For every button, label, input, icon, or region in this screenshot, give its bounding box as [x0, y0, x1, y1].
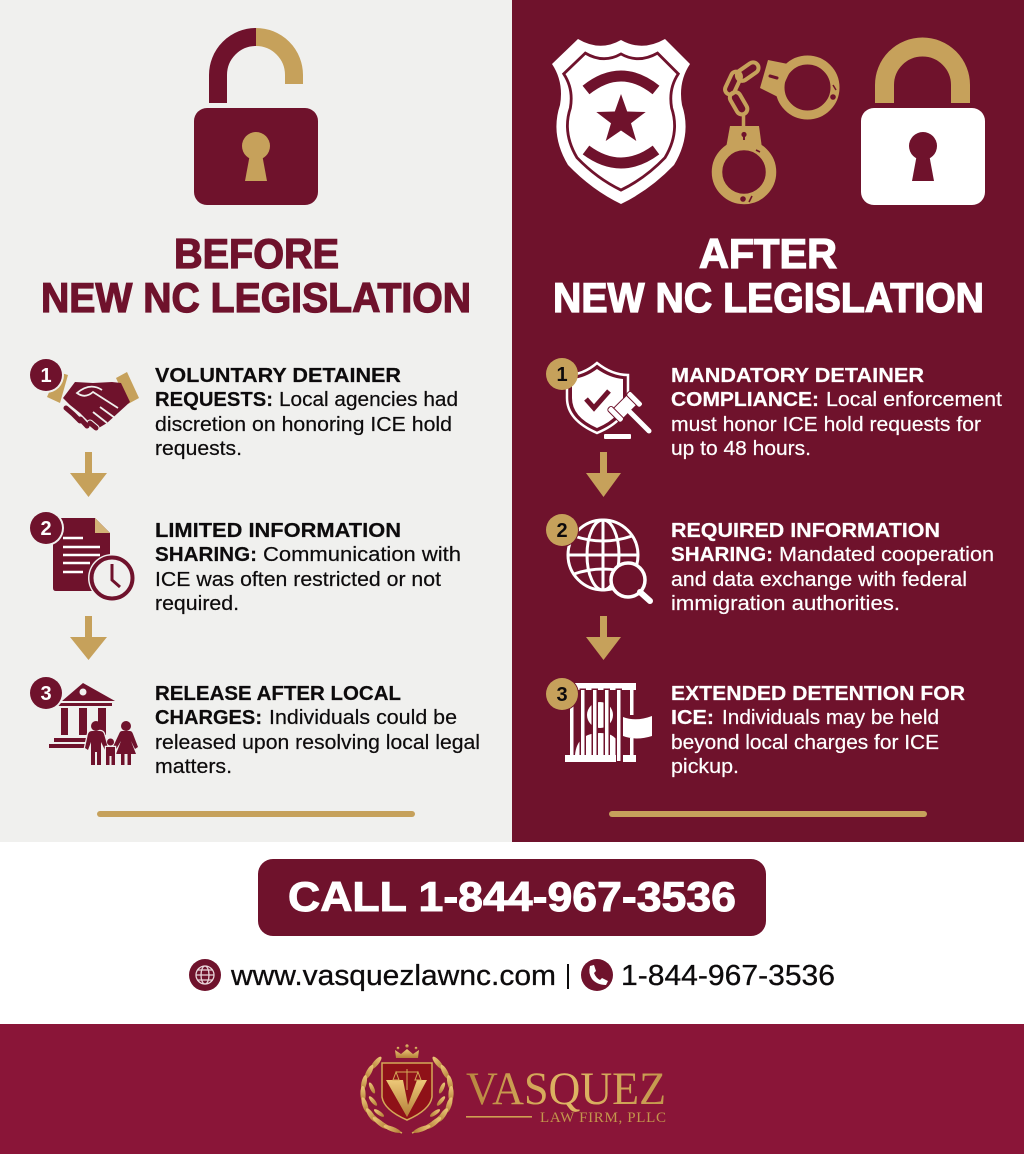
step 2 after: text: SHARING: [671, 543, 773, 566]
icon: phone [581, 959, 613, 991]
step 3 after: text [671, 682, 965, 778]
step 1 after: text: up to 48 hours. [671, 437, 811, 460]
step 2 after: icon globe and magnifier [545, 513, 650, 601]
family figures with halo [85, 731, 138, 765]
arrow: before step 2 to 3 [70, 616, 107, 660]
step 2 after: text: immigration authorities. [671, 592, 900, 615]
step 1 before: text: VOLUNTARY DETAINER [155, 364, 401, 387]
step 1 after: icon shield and gavel [546, 358, 649, 439]
phone number: 1-844-967-3536 [621, 960, 835, 992]
step 3 before: text: RELEASE AFTER LOCAL [155, 682, 401, 705]
step 3 before: icon courthouse and family: 3 [40, 683, 52, 705]
step 3 before: text: matters. [155, 755, 232, 778]
heading: after: NEW NC LEGISLATION [553, 274, 984, 321]
wordmark: VASQUEZ [466, 1063, 666, 1115]
arrow: before step 1 to 2 [70, 452, 107, 497]
step 1 after: text: must honor ICE hold requests for [671, 413, 981, 436]
separator [567, 964, 569, 989]
step 3 after: text: ICE: [671, 706, 714, 729]
step 3 after: text: Individuals may be held [722, 706, 939, 729]
step 3 before: icon courthouse and family [28, 675, 138, 765]
crest V [386, 1080, 427, 1117]
heading: after [553, 230, 984, 321]
icon: police badge [552, 39, 690, 204]
step 1 before: text: Local agencies had [279, 388, 458, 411]
step 2 after: text: REQUIRED INFORMATION [671, 519, 940, 542]
step 2 after: icon globe and magnifier: 2 [556, 520, 568, 542]
step 3 before: text: CHARGES: [155, 706, 262, 729]
divider bar: before [97, 811, 415, 817]
icon: open padlock [194, 37, 318, 205]
panel: after background [512, 0, 1024, 842]
icon: globe [189, 959, 221, 991]
call to action button: CALL 1-844-967-3536 [288, 873, 736, 920]
step 1 before: text: discretion on honoring ICE hold [155, 413, 452, 436]
wordmark rule [466, 1116, 532, 1118]
crest crown [395, 1044, 419, 1058]
step 3 after: icon jail cell and flag: 3 [556, 684, 568, 706]
step 1 after: text: Local enforcement [826, 388, 1002, 411]
heading: before: NEW NC LEGISLATION [41, 274, 471, 321]
heading: after: AFTER [699, 230, 837, 277]
step 3 before: text: released upon resolving local legal [155, 731, 480, 754]
step 1 before: text [155, 364, 458, 460]
logo: Vasquez Law Firm [360, 1044, 666, 1134]
heading: before: BEFORE [174, 230, 339, 277]
step 2 before: text: ICE was often restricted or not [155, 568, 441, 591]
step 3 before: text [155, 682, 480, 778]
wordmark subtitle: LAW FIRM, PLLC [540, 1110, 666, 1126]
panel: contact background [0, 842, 1024, 1024]
panel: before background [0, 0, 512, 842]
icon: closed padlock [861, 47, 985, 205]
step 3 after: text: beyond local charges for ICE [671, 731, 939, 754]
heading: before [41, 230, 471, 321]
step 1 before: text: requests. [155, 437, 242, 460]
step 3 after: text: EXTENDED DETENTION FOR [671, 682, 965, 705]
step 1 before: text: REQUESTS: [155, 388, 273, 411]
arrow: after step 1 to 2 [586, 452, 621, 497]
step 2 after: text: Mandated cooperation [779, 543, 994, 566]
step 3 after: icon jail cell and flag [545, 677, 652, 762]
step 2 before: icon document and clock [28, 510, 136, 602]
step 2 after: text [671, 519, 994, 615]
contact line [189, 959, 835, 992]
step 2 before: icon document and clock: 2 [40, 518, 52, 540]
step 3 after: text: pickup. [671, 755, 739, 778]
step 2 before: text: SHARING: [155, 543, 257, 566]
step 1 after: icon shield and gavel: 1 [556, 364, 568, 386]
icon: handcuffs [717, 60, 836, 202]
divider bar: after [609, 811, 927, 817]
website: www.vasquezlawnc.com [230, 960, 556, 992]
arrow: after step 2 to 3 [586, 616, 621, 660]
step 1 after: text [671, 364, 1002, 460]
panel: footer band [0, 1024, 1024, 1154]
crest shield [382, 1063, 432, 1120]
step 2 before: text: required. [155, 592, 239, 615]
step 2 before: text [155, 519, 461, 615]
call to action button [258, 859, 766, 936]
step 2 after: text: and data exchange with federal [671, 568, 967, 591]
step 1 after: text: MANDATORY DETAINER [671, 364, 924, 387]
crest wreath [360, 1055, 454, 1134]
step 2 before: text: Communication with [263, 543, 461, 566]
step 2 before: text: LIMITED INFORMATION [155, 519, 401, 542]
crest scales [393, 1069, 421, 1090]
step 1 after: text: COMPLIANCE: [671, 388, 819, 411]
step 3 before: text: Individuals could be [269, 706, 457, 729]
step 1 before: icon handshake: 1 [40, 365, 52, 387]
step 1 before: icon handshake [28, 357, 139, 429]
